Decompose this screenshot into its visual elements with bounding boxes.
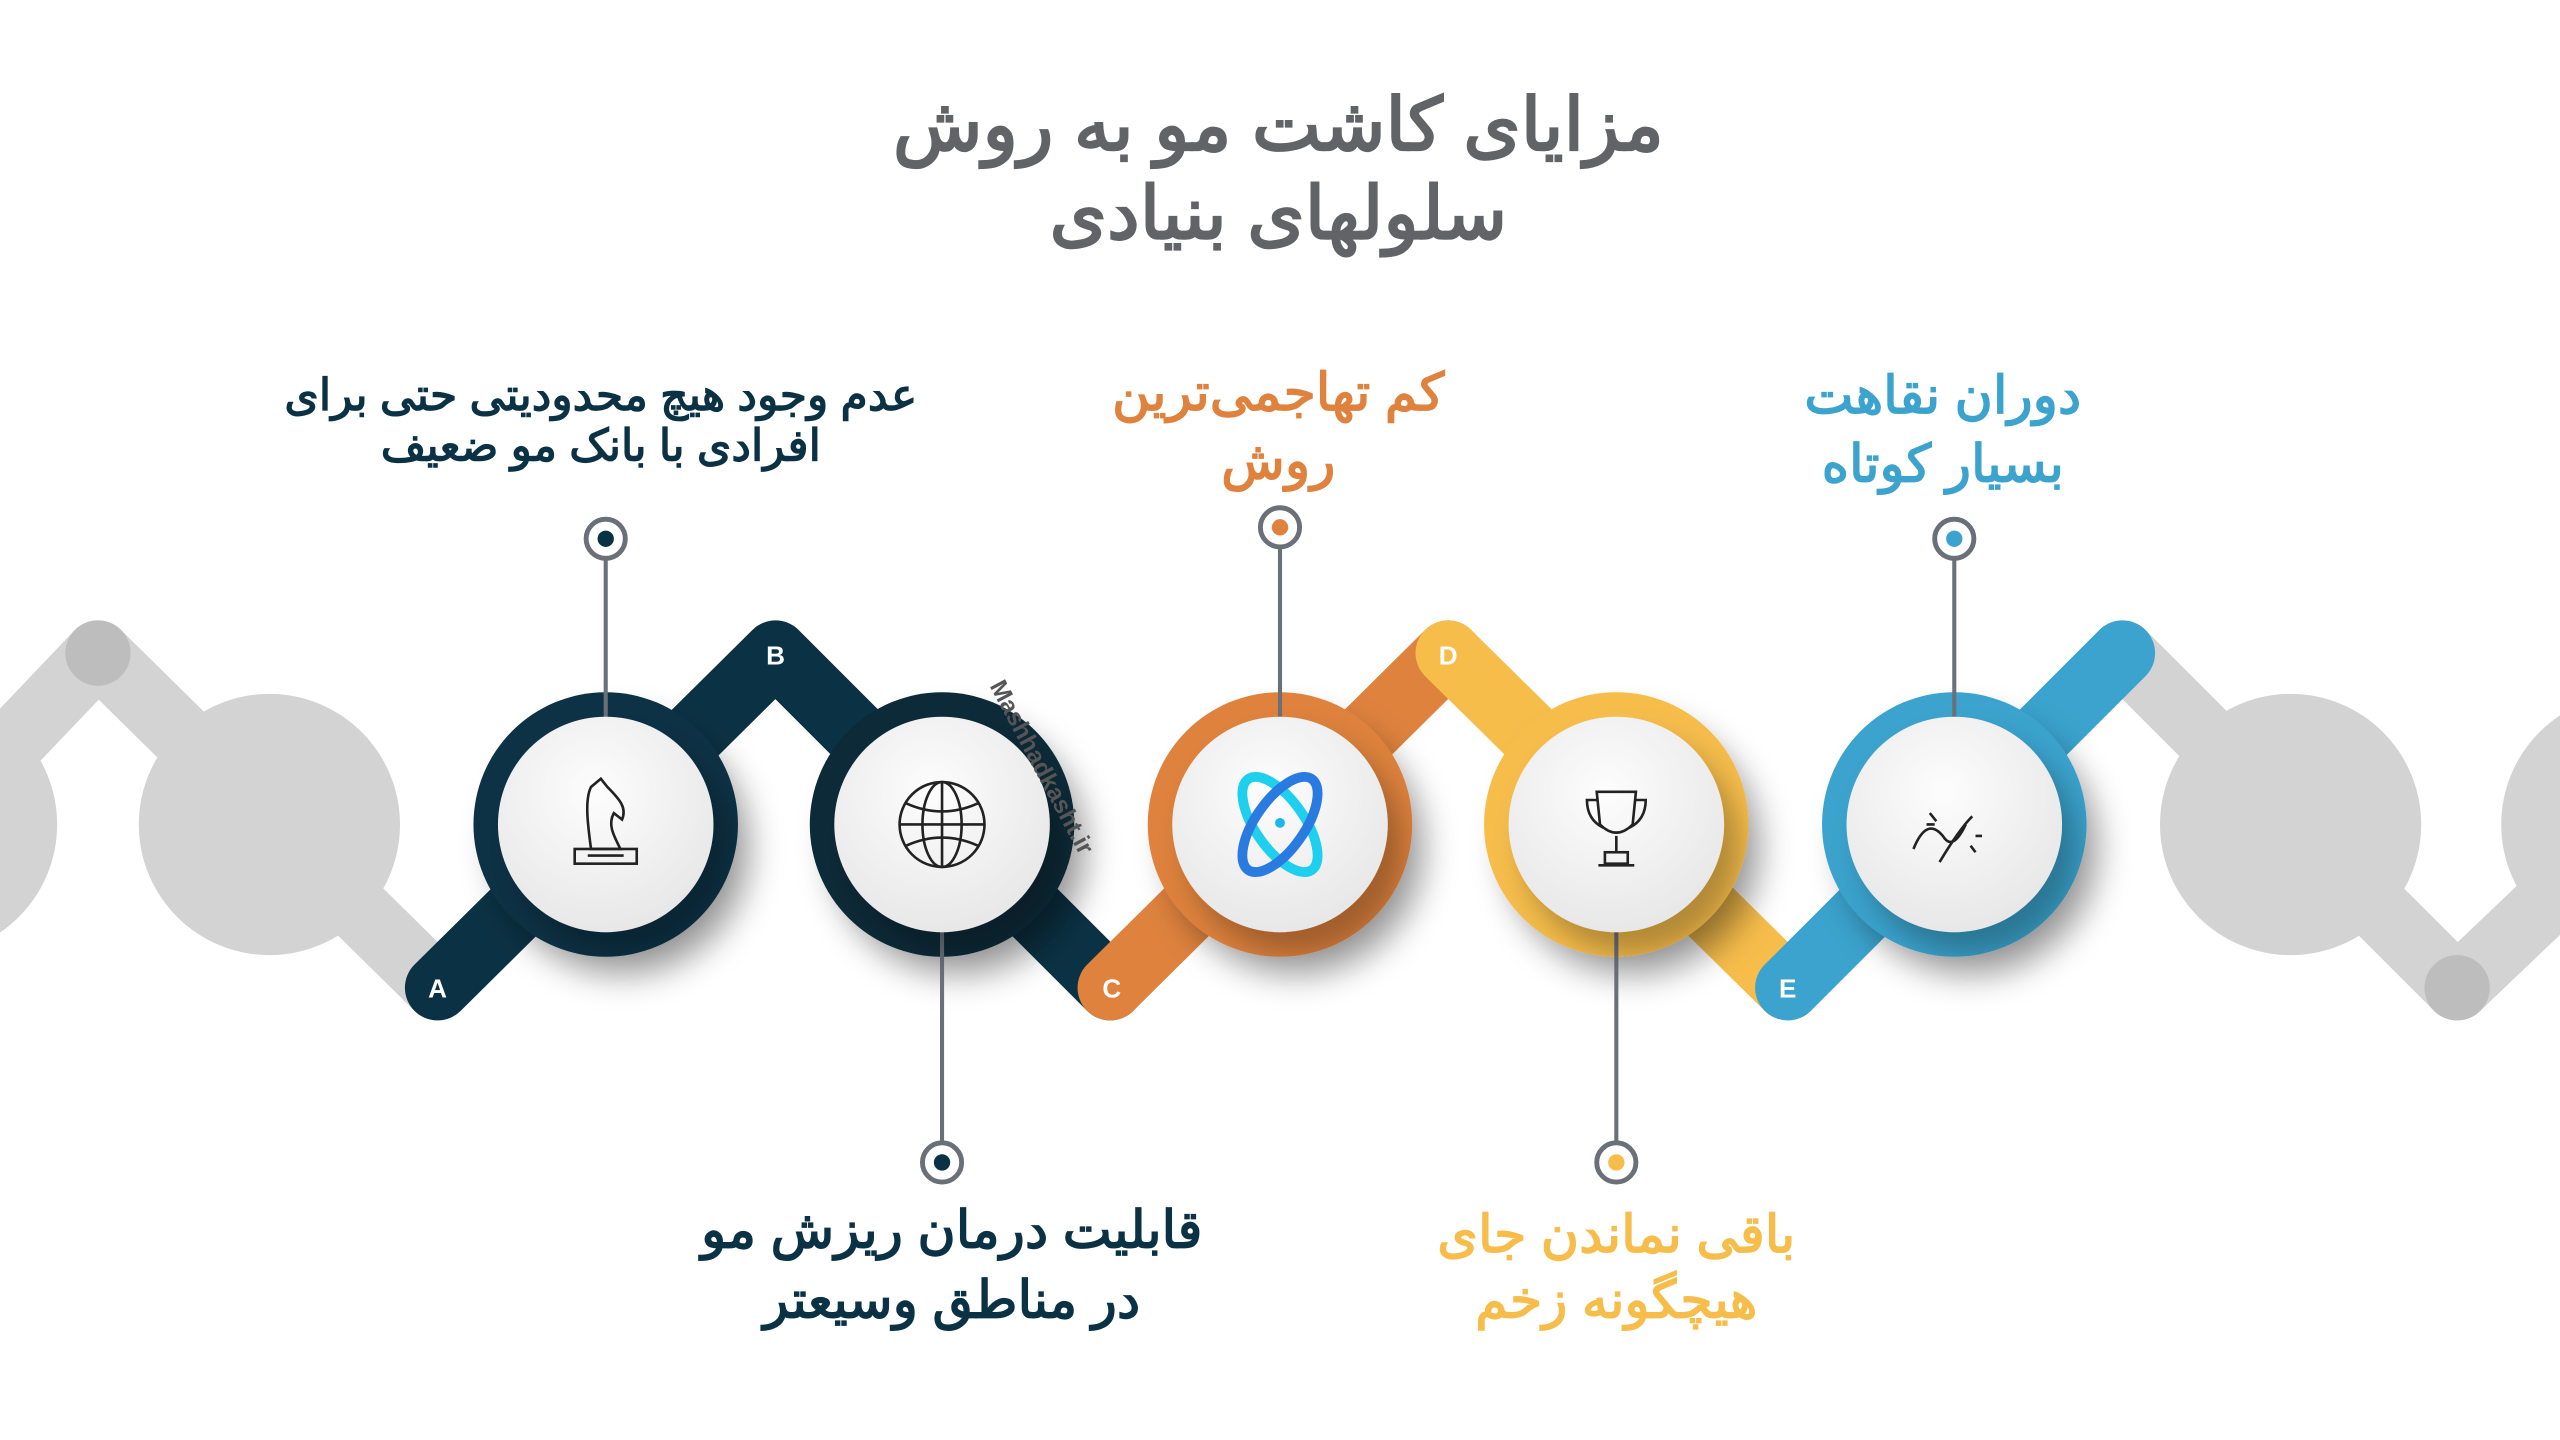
text: item C <box>1112 364 1446 492</box>
icon: globe <box>900 782 984 867</box>
watermark: Mashhadkasht.ir <box>984 676 1099 859</box>
icon: atom <box>1228 765 1332 884</box>
letters A-E: C <box>1102 974 1121 1004</box>
letters A-E: B <box>766 640 785 670</box>
letters A-E: D <box>1439 640 1458 670</box>
text: item E: بسیار کوتاه <box>1822 436 2064 496</box>
text: item B: قابلیت درمان ریزش مو <box>698 1201 1203 1261</box>
text: item D <box>1437 1206 1795 1332</box>
text: item A: افرادی با بانک مو ضعیف <box>381 421 821 472</box>
chain segment: orange C-D <box>1110 653 1448 988</box>
chain segment: yellow D-E <box>1448 653 1788 988</box>
text: item D: باقی نماندن جای <box>1437 1206 1795 1264</box>
gray decorative left chain <box>0 620 438 988</box>
letters A-E: E <box>1779 974 1796 1004</box>
text: item B <box>698 1201 1203 1332</box>
icon: broken link <box>1913 813 1982 862</box>
title: مزایای کاشت مو به روش <box>893 83 1664 169</box>
chain segment: dark A-B-C <box>438 653 1110 988</box>
letters A-E: A <box>428 974 447 1004</box>
text: item E <box>1804 367 2081 496</box>
text: item C: روش <box>1221 432 1335 492</box>
white inner discs <box>498 717 2062 932</box>
title: سلولهای بنیادی <box>1050 171 1507 257</box>
text: item C: کم تهاجمی‌ترین <box>1112 364 1446 424</box>
text: item B: در مناطق وسیعتر <box>760 1272 1140 1332</box>
connector stems and markers <box>586 508 1974 1182</box>
text: item D: هیچگونه زخم <box>1475 1270 1757 1332</box>
icon: trophy <box>1587 792 1646 865</box>
icon: chess knight <box>575 779 637 864</box>
gray decorative right chain <box>2122 653 2560 1020</box>
text: item A <box>284 371 917 472</box>
chain segment: blue E <box>1788 653 2122 988</box>
text: item A: عدم وجود هیچ محدودیتی حتی برای <box>284 371 917 422</box>
title <box>893 83 1664 257</box>
letters A-E <box>428 640 1796 1004</box>
text: item E: دوران نقاهت <box>1804 367 2081 427</box>
